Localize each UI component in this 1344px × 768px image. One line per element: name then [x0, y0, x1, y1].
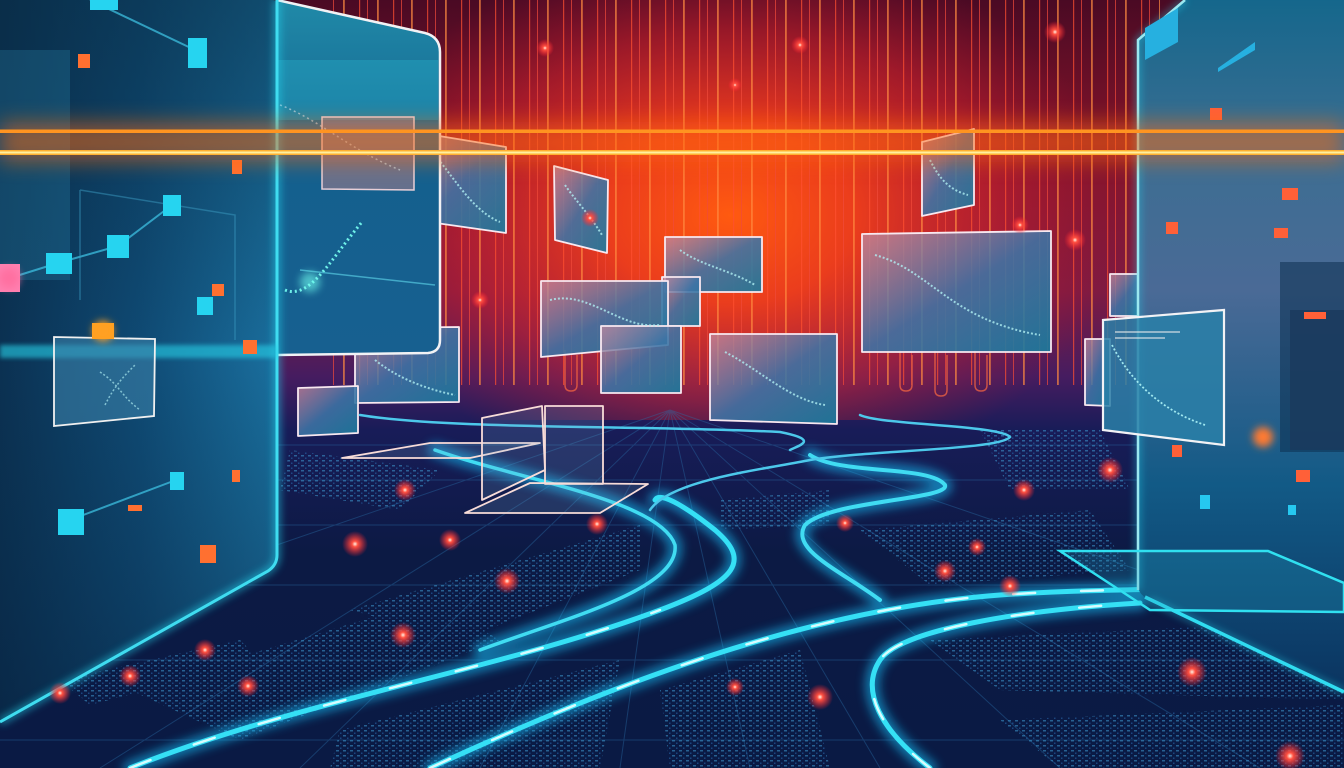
card: small centre [662, 277, 700, 326]
right wall edge [1138, 0, 1185, 590]
upper beam [0, 130, 1344, 133]
floor plate left [342, 443, 540, 458]
top-left cyan block [1145, 8, 1178, 60]
panel: far floating glass cards [298, 129, 1142, 436]
chart traces inside cards [375, 150, 1040, 405]
card: behind tall panel [355, 327, 459, 403]
card: tilted top right [922, 129, 974, 216]
beam glow [0, 122, 1344, 162]
panel: large left glass wall [0, 0, 277, 722]
stream: far winding [360, 415, 1010, 510]
wall edge [0, 0, 277, 722]
stream: main central flow [430, 585, 1344, 768]
glass floor plate [1060, 551, 1344, 612]
card: tilted centre [554, 166, 608, 253]
glow spot [300, 272, 320, 292]
lower beam core [0, 152, 1344, 154]
stream: right loop [872, 603, 1140, 768]
card: centre overlap [601, 326, 681, 393]
card: centre left [541, 281, 668, 357]
network line lower [70, 480, 176, 520]
cube left face [482, 406, 545, 500]
floor plate front [465, 483, 648, 513]
card: large right [862, 231, 1051, 352]
stream: left lower flow [130, 497, 734, 768]
floor: perspective grid and data dots [0, 410, 1344, 768]
card: narrow right [1085, 339, 1110, 406]
glass card front [1103, 310, 1224, 445]
stream: left winding [435, 450, 675, 650]
pink node [0, 264, 20, 292]
glow: orange hot nodes [0, 268, 1273, 447]
horizontal laser beams across the whole scene [0, 122, 1344, 162]
dotted trace [285, 222, 362, 292]
cyan squares [46, 0, 213, 535]
glass card on wall [54, 337, 155, 426]
network line middle [10, 205, 172, 278]
card: small right [1110, 274, 1142, 316]
wireframe cube on the floor [342, 406, 648, 513]
orange central glow [200, 0, 1300, 420]
card: tilted upper [415, 132, 506, 233]
network line upper [90, 0, 195, 50]
horizontal cyan band [0, 345, 277, 358]
wall edge glow [0, 0, 277, 722]
red and orange nodes on wall [1166, 108, 1326, 515]
card: small lower left [298, 386, 358, 436]
inner card [322, 117, 414, 190]
cyan glowing data streams: main [130, 415, 1344, 768]
stream highlights [130, 585, 1344, 768]
panel: tall central-left glass panel [277, 0, 440, 355]
wireframe frame [80, 190, 235, 340]
stream: central winding [802, 455, 945, 600]
lower beam [0, 150, 1344, 155]
orange nodes [78, 54, 257, 563]
cyan glowing data streams: soft halo [130, 450, 1344, 768]
panel: large right glass wall [1060, 0, 1344, 692]
card: centre right [710, 334, 837, 424]
vertical circuit lines [330, 0, 1160, 396]
card: wide top centre [665, 237, 762, 292]
right wall edge glow [1138, 0, 1344, 692]
cube back face [545, 406, 603, 484]
